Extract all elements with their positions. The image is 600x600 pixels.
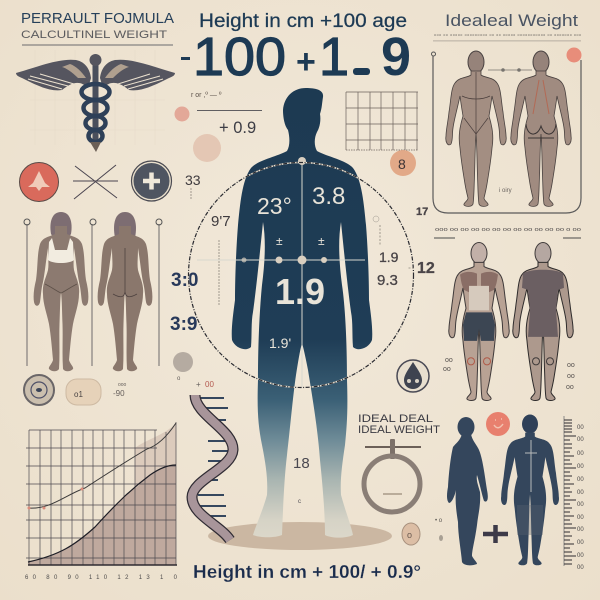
figure: front xyxy=(446,51,506,206)
ruler: 00 xyxy=(577,502,584,508)
side labels right of figure: 12 xyxy=(417,260,435,277)
ruler: 00 xyxy=(577,515,584,521)
ruler: 00 xyxy=(577,437,584,443)
big formula numbers: 9 xyxy=(381,27,411,87)
ideal weight caption: IDEAL WEIGHT xyxy=(358,424,440,436)
small circles row: + xyxy=(196,380,201,389)
grid chart top xyxy=(346,92,418,150)
panel: female figures front and back xyxy=(24,212,162,371)
panel: muscle figures: ooo oo oo oo oo oo oo oo oo oo oo oo o oo xyxy=(435,227,581,233)
side labels right of figure: 17 xyxy=(416,206,428,218)
panel: muscle figures xyxy=(434,227,581,400)
ideal weight caption xyxy=(358,413,440,436)
number labels between legs: 18 xyxy=(293,455,310,472)
ruler: 00 xyxy=(577,451,584,457)
dots xyxy=(174,106,221,162)
body numbers: 1.9 xyxy=(275,271,325,312)
small lock badge xyxy=(402,518,443,545)
ruler: 00 xyxy=(577,565,584,571)
figure: female front xyxy=(34,212,88,371)
big formula numbers: 100 xyxy=(193,27,286,87)
figure: front muscle xyxy=(449,242,509,400)
panel: muscle figures: oo xyxy=(445,357,453,364)
side labels left of figure xyxy=(170,172,231,335)
ground shadow xyxy=(208,522,392,550)
side labels right of figure: 9.3 xyxy=(377,272,398,289)
measurement lines xyxy=(197,162,365,388)
scale marker xyxy=(488,69,532,71)
panel: front and back anatomy: i oiry xyxy=(499,188,512,194)
small circles row xyxy=(24,352,214,405)
icon: droplet badge xyxy=(397,360,429,392)
ruler: 00 xyxy=(577,540,584,546)
central body silhouette xyxy=(197,88,372,538)
small circles row: -90 xyxy=(113,389,125,398)
ideal weight caption: IDEAL DEAL xyxy=(358,413,433,425)
title: ideal weight: ooo oo ooooo ooooooooo oo oo ooooo ooooooooooo oo ooooooo ooo xyxy=(434,33,581,37)
ruler: 00 xyxy=(577,464,584,470)
big formula numbers: 1 xyxy=(319,27,349,87)
body numbers: ± xyxy=(318,234,325,248)
figure: back xyxy=(511,51,571,206)
body numbers: 3.8 xyxy=(312,183,345,210)
title: Perrault formula: CALCULTINEL WEIGHT xyxy=(21,29,167,41)
number labels between legs xyxy=(293,455,310,505)
panel: front and back anatomy xyxy=(432,48,582,213)
side labels left of figure: 3:0 xyxy=(171,270,198,291)
small formula: r or ,º — º xyxy=(191,92,222,99)
title: Perrault formula xyxy=(21,10,174,46)
silhouette: man front view xyxy=(501,414,559,565)
icon: ring scale xyxy=(364,439,421,512)
figure: back muscle xyxy=(513,242,573,400)
bottom formula: Height in cm + 100/ + 0.9° xyxy=(193,561,421,582)
title: Perrault formula: PERRAULT FOJMULA xyxy=(21,10,174,27)
big formula numbers xyxy=(181,27,411,87)
body numbers: 23° xyxy=(257,193,292,219)
icon: caduceus xyxy=(16,50,175,152)
title: ideal weight: Idealeal Weight xyxy=(445,12,578,30)
icon: red smile badge xyxy=(486,412,510,436)
ruler xyxy=(564,416,584,571)
big formula numbers: + xyxy=(296,43,316,81)
panel: muscle figures: oo xyxy=(443,366,451,373)
side labels left of figure: 33 xyxy=(185,172,201,188)
panel: muscle figures: oo xyxy=(567,362,575,369)
chart: weight curve: 60 80 90 110 12 13 1 0 xyxy=(25,575,178,581)
ruler: 00 xyxy=(577,490,584,496)
chart: weight curve xyxy=(25,422,178,581)
peach number badge: 8 xyxy=(398,156,406,172)
number labels between legs: c xyxy=(298,499,301,505)
silhouette: woman side view xyxy=(447,417,488,565)
small circles row: ooo xyxy=(118,382,127,388)
measurement circle xyxy=(188,162,414,388)
body numbers: ± xyxy=(276,234,283,248)
icon: plus sign xyxy=(483,525,508,543)
body numbers xyxy=(257,183,345,351)
small circles row: o1 xyxy=(74,390,83,399)
formula heading: Height in cm +100 age xyxy=(199,11,407,32)
side labels right of figure: 1.9 xyxy=(379,249,399,265)
body numbers: 1.9' xyxy=(269,335,291,351)
ruler: 00 xyxy=(577,527,584,533)
peach number badge xyxy=(390,150,416,176)
ruler: 00 xyxy=(577,425,584,431)
small circles row: o xyxy=(177,376,181,382)
small formula: + 0.9 xyxy=(219,119,256,137)
small lock badge: o xyxy=(407,530,412,540)
side labels left of figure: 3:9 xyxy=(170,314,197,335)
title: ideal weight xyxy=(433,12,581,41)
panel: muscle figures: oo xyxy=(566,384,574,391)
small circles row: 00 xyxy=(205,380,214,389)
icons: red badge, cross, plus xyxy=(20,161,172,202)
side labels left of figure: 9'7 xyxy=(211,213,231,230)
panel: muscle figures: oo xyxy=(567,373,575,380)
badge xyxy=(566,48,582,62)
side labels right of figure xyxy=(373,206,435,289)
ruler: 00 xyxy=(577,477,584,483)
icon: DNA helix xyxy=(192,395,233,540)
small lock badge: • o xyxy=(435,518,443,524)
small formula xyxy=(191,92,262,137)
figure: female back xyxy=(98,212,152,371)
ruler: 00 xyxy=(577,553,584,559)
